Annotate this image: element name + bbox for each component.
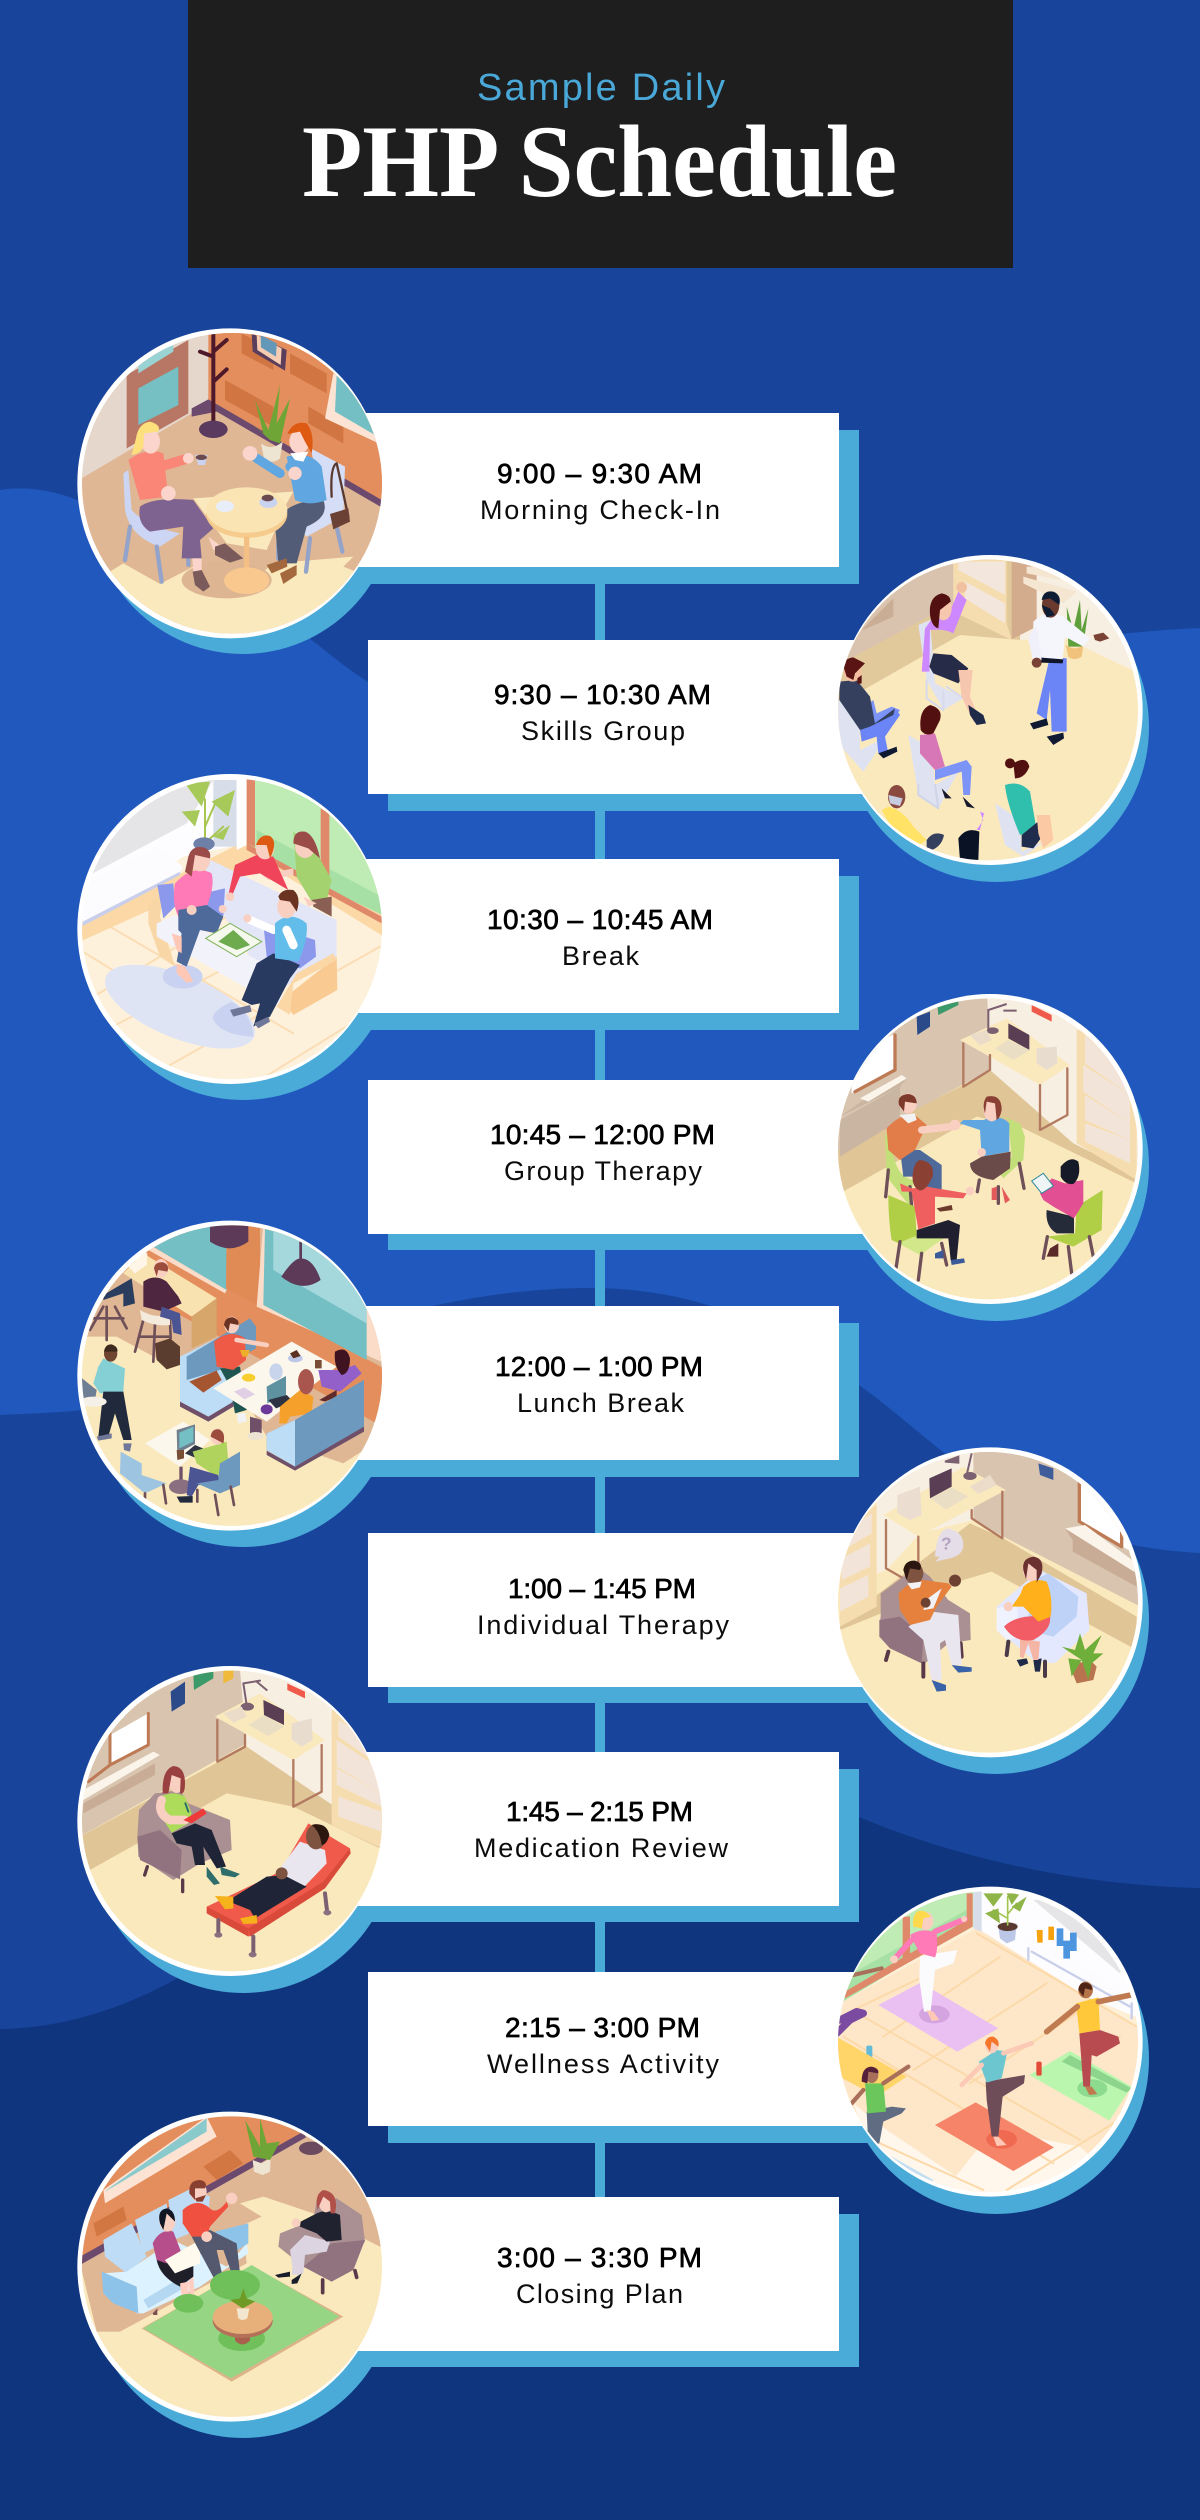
activity: Individual Therapy (477, 1610, 730, 1640)
time: 9:00 – 9:30 AM (497, 458, 702, 489)
illustration: four people in a therapy circle (838, 994, 1143, 1304)
time: 10:45 – 12:00 PM (490, 1119, 715, 1150)
illustration: patient on couch with therapist (77, 1666, 382, 1976)
illustration: two women at a cafe table (77, 328, 382, 638)
activity: Wellness Activity (487, 2049, 720, 2079)
activity: Group Therapy (504, 1156, 702, 1186)
step 4: group therapy (368, 980, 1160, 1330)
step 9: closing plan (60, 2100, 859, 2450)
time: 12:00 – 1:00 PM (495, 1351, 703, 1382)
step 1: morning check-in (60, 310, 859, 660)
illustration: group circle with standing facilitator (838, 555, 1143, 865)
activity: Closing Plan (516, 2279, 683, 2309)
step 7: medication review (60, 1650, 859, 2000)
time: 1:00 – 1:45 PM (508, 1573, 696, 1604)
illustration: counselor and client in armchairs: ? (941, 1533, 952, 1553)
activity: Morning Check-In (480, 495, 720, 525)
title header (188, 0, 1013, 268)
illustration: busy cafe with booths and laptops (77, 1220, 382, 1531)
activity: Medication Review (474, 1833, 728, 1863)
activity: Lunch Break (517, 1388, 684, 1418)
time: 10:30 – 10:45 AM (487, 904, 713, 935)
step 6: individual therapy (368, 1430, 1160, 1780)
illustration: family session on a sofa with counselor (77, 2112, 382, 2422)
illustration: friends on a sofa playing a board game (77, 774, 382, 1084)
time: 1:45 – 2:15 PM (506, 1796, 693, 1827)
timeline connectors (595, 584, 605, 2197)
step 3: break (60, 760, 859, 1110)
step 5: lunch break (60, 1210, 859, 1560)
main title: PHP Schedule (302, 105, 897, 219)
step 2: skills group (368, 540, 1160, 890)
illustration: counselor and client in armchairs (838, 1447, 1143, 1758)
time: 9:30 – 10:30 AM (494, 679, 711, 710)
time: 2:15 – 3:00 PM (505, 2012, 700, 2043)
time: 3:00 – 3:30 PM (497, 2242, 702, 2273)
illustration: yoga class on coloured mats (838, 1886, 1143, 2197)
activity: Break (562, 941, 640, 971)
step 8: wellness activity (368, 1870, 1160, 2220)
activity: Skills Group (521, 716, 685, 746)
subtitle: Sample Daily (477, 67, 725, 109)
